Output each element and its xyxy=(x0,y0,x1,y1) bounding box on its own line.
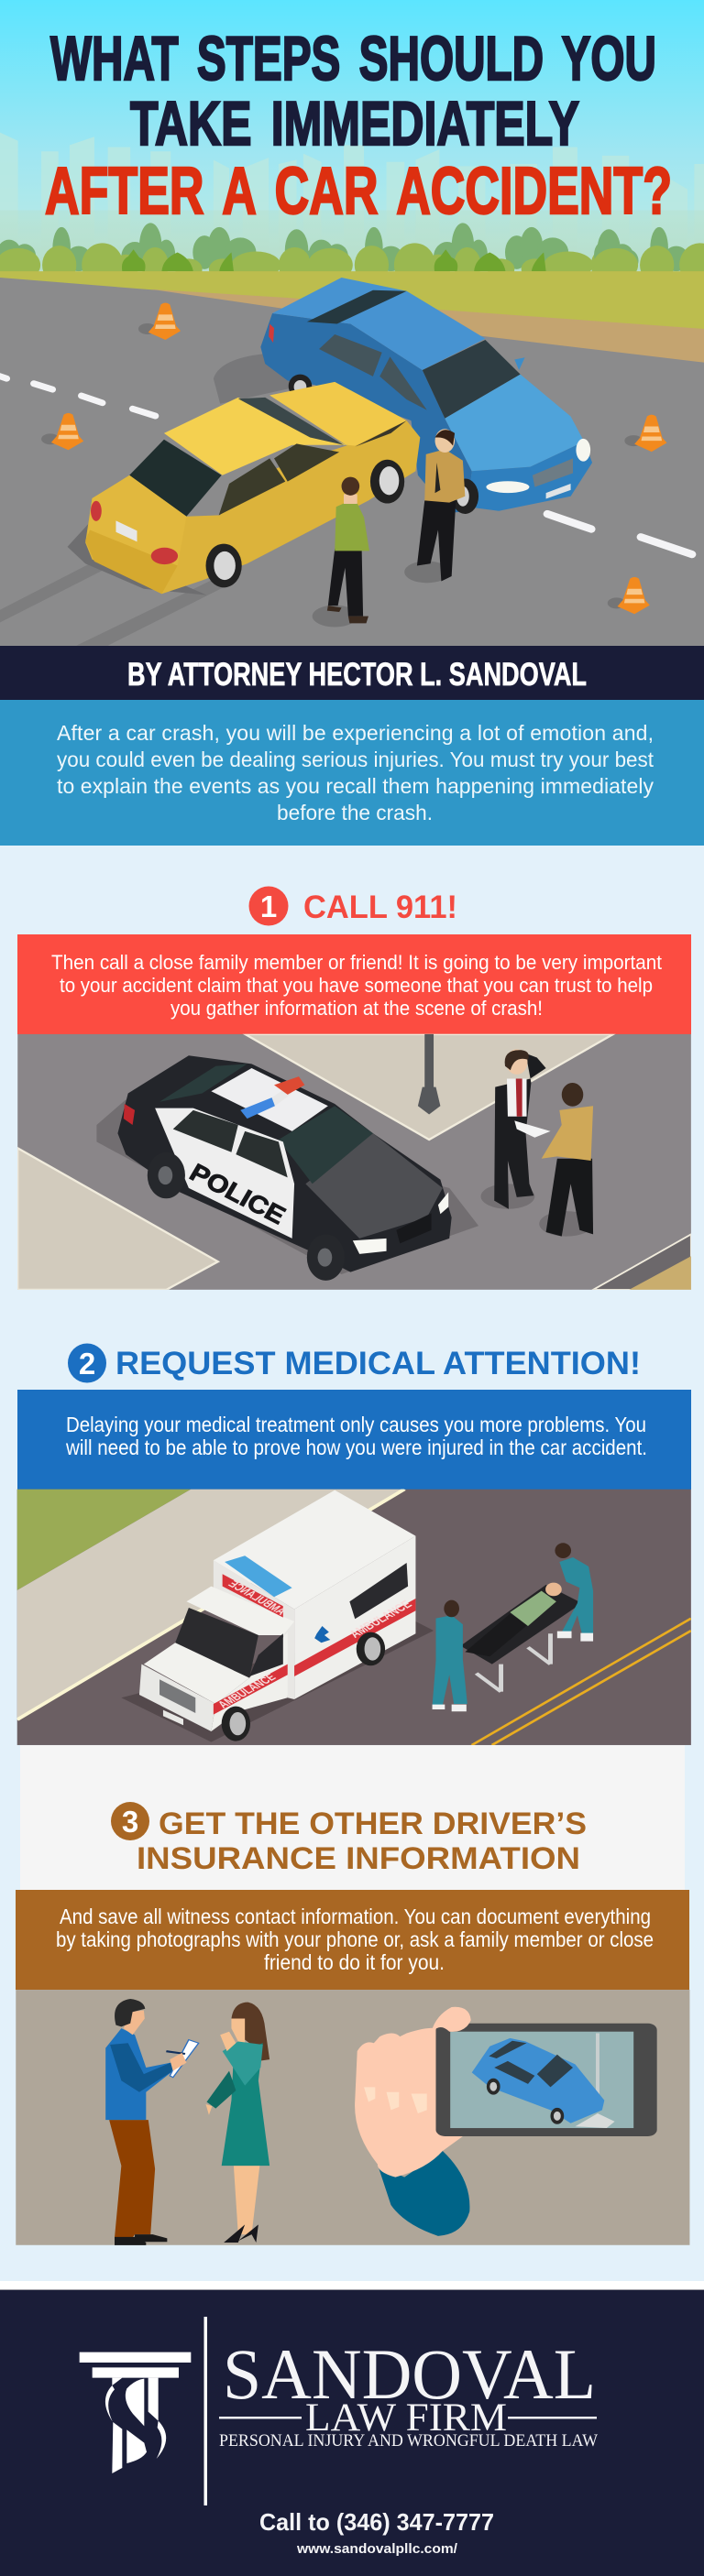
crashed blue car on screen xyxy=(472,2034,615,2128)
city skyline xyxy=(0,133,704,271)
ambulance: AMBULANCE xyxy=(226,1577,290,1617)
man with clipboard xyxy=(105,1999,199,2246)
title xyxy=(45,24,672,228)
firm name: PERSONAL INJURY AND WRONGFUL DEATH LAW xyxy=(219,2431,598,2450)
firm name: SANDOVAL xyxy=(223,2334,596,2414)
man in green sweater xyxy=(313,477,369,628)
step 3 heading: 3 xyxy=(122,1805,138,1839)
medic front xyxy=(433,1600,468,1711)
hand holding phone xyxy=(355,2007,657,2236)
ambulance: AMBULANCE xyxy=(346,1598,415,1640)
lamp post xyxy=(418,1034,440,1114)
step 3 heading: GET THE OTHER DRIVER’S xyxy=(159,1806,587,1841)
step 1 illustration: police car xyxy=(17,1034,691,1290)
step 2 text panel xyxy=(17,1390,691,1490)
step 1 text panel xyxy=(17,934,691,1034)
step 1 heading: CALL 911! xyxy=(303,890,457,925)
step 3 text panel xyxy=(16,1890,689,1990)
medic rear xyxy=(555,1543,593,1642)
stretcher with patient xyxy=(460,1583,582,1692)
grass verge xyxy=(0,271,704,333)
man in suit xyxy=(481,1049,550,1209)
step 1 text panel: Then call a close family member or friend! It is going to be very important xyxy=(51,951,662,974)
intro panel xyxy=(0,700,704,846)
ambulance xyxy=(121,1490,434,1742)
ambulance: AMBULANCE xyxy=(214,1671,279,1710)
step 2 heading: 2 xyxy=(79,1347,95,1381)
intro panel: to explain the events as you recall them happening immediately xyxy=(57,774,654,798)
step 1 heading xyxy=(249,887,457,925)
logo divider xyxy=(204,2317,207,2505)
police car: POLICE xyxy=(185,1158,291,1229)
sky xyxy=(0,0,704,278)
step 3 heading: INSURANCE INFORMATION xyxy=(137,1841,580,1876)
step 3 text panel: And save all witness contact information. You can document everything xyxy=(60,1905,651,1928)
step 3 text panel: friend to do it for you. xyxy=(264,1950,445,1974)
step 2 heading: REQUEST MEDICAL ATTENTION! xyxy=(116,1346,641,1381)
road and sidewalks xyxy=(17,1034,691,1290)
intro panel: before the crash. xyxy=(277,801,433,824)
firm name xyxy=(219,2334,598,2450)
step 2 illustration: ambulance xyxy=(17,1490,691,1745)
byline band: BY ATTORNEY HECTOR L. SANDOVAL xyxy=(127,657,587,693)
road, grass and sidewalk xyxy=(17,1490,691,1745)
step 1 heading: 1 xyxy=(260,890,277,923)
law firm logo mark xyxy=(80,2352,191,2473)
traffic cones xyxy=(41,303,666,614)
step 1 text panel: to your accident claim that you have someone that you can trust to help xyxy=(60,974,653,997)
website: www.sandovalpllc.com/ xyxy=(296,2541,458,2557)
footer xyxy=(0,2289,704,2576)
step 3 illustration xyxy=(16,1990,689,2246)
intro panel: you could even be dealing serious injuries. You must try your best xyxy=(57,748,654,771)
officer xyxy=(539,1083,593,1237)
blue car xyxy=(214,278,592,514)
step 2 text panel: will need to be able to prove how you were injured in the car accident. xyxy=(65,1435,647,1459)
byline band xyxy=(0,646,704,700)
yellow car xyxy=(68,382,420,595)
step 2 text panel: Delaying your medical treatment only causes you more problems. You xyxy=(66,1413,646,1436)
step 3 background panel xyxy=(20,1745,685,1890)
police car xyxy=(96,1055,478,1281)
firm name: LAW FIRM xyxy=(305,2396,507,2440)
woman xyxy=(206,2003,270,2243)
road surface xyxy=(0,278,704,648)
hero illustration: accident scene xyxy=(0,0,704,648)
step 3 heading xyxy=(111,1802,587,1876)
step 1 text panel: you gather information at the scene of crash! xyxy=(170,997,543,1020)
tree line xyxy=(0,223,704,287)
officer xyxy=(404,429,465,583)
skid marks xyxy=(0,563,225,646)
lane dashes xyxy=(0,376,692,554)
intro panel: After a car crash, you will be experiencing a lot of emotion and, xyxy=(57,721,654,745)
dirt shoulder xyxy=(153,289,704,366)
phone number: Call to (346) 347-7777 xyxy=(259,2508,494,2536)
